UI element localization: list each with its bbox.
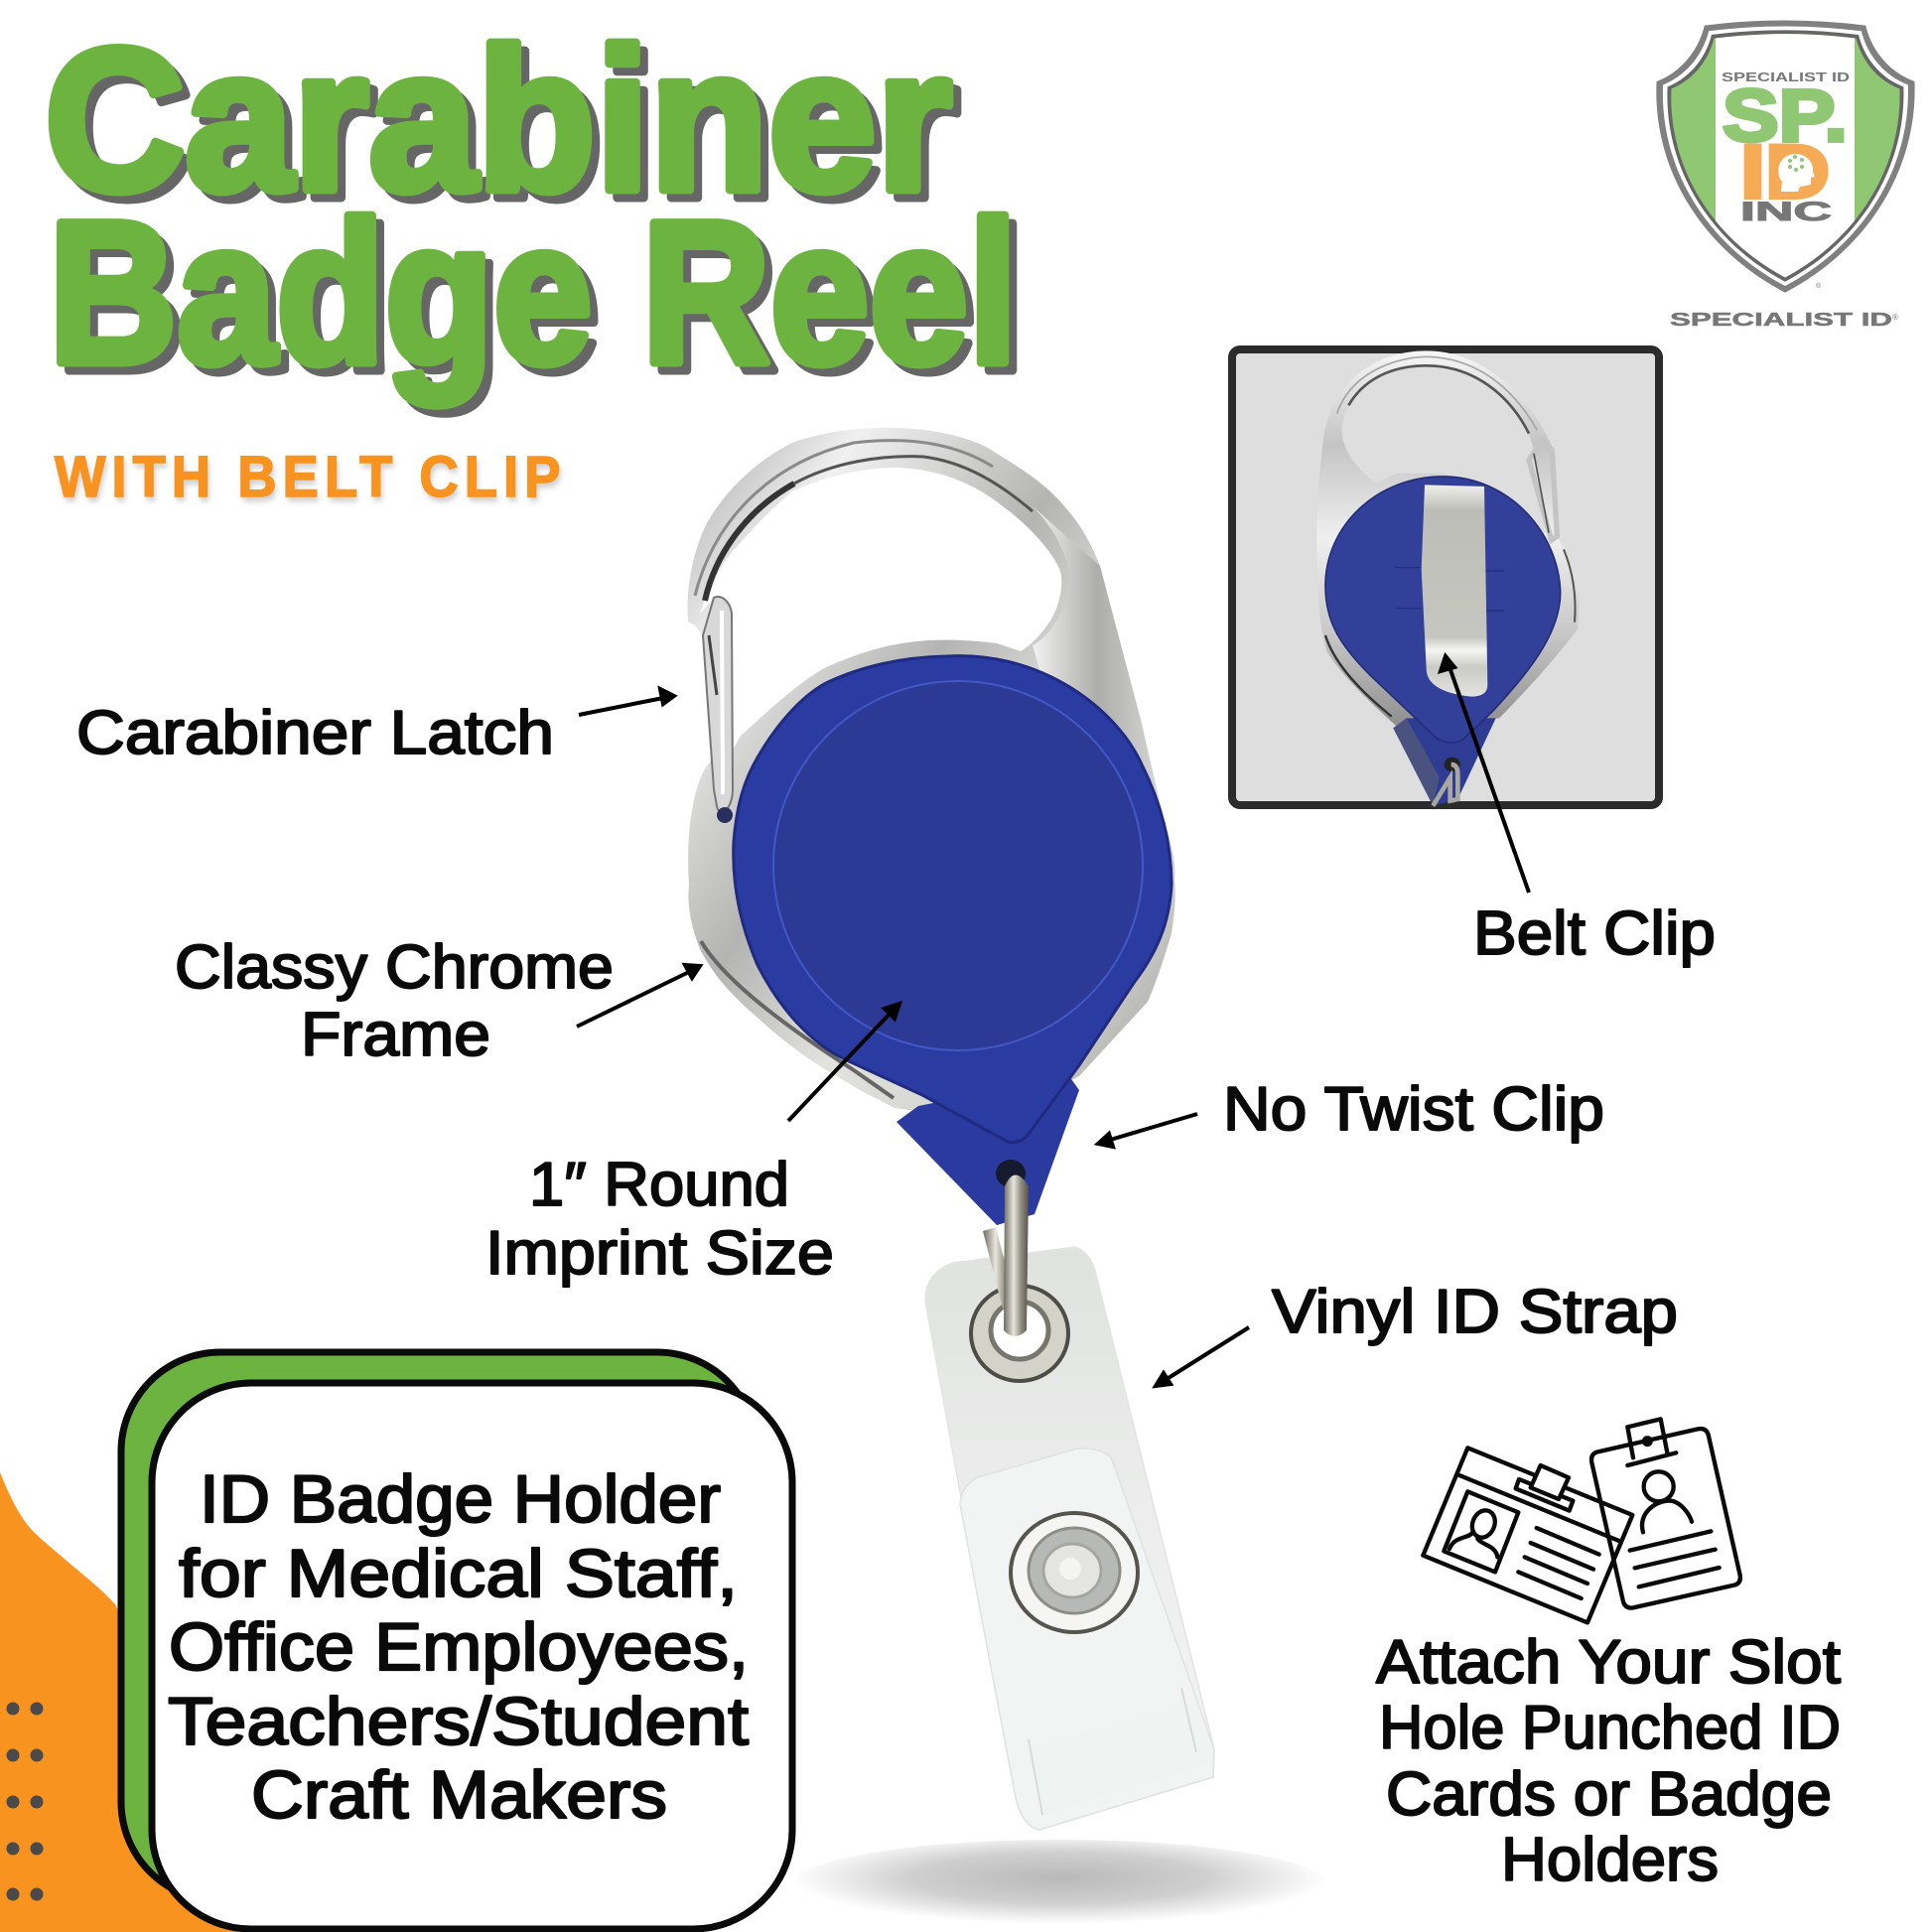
panel: back view inset <box>1232 349 1659 806</box>
title: Badge Reel <box>49 180 1018 406</box>
arrow: carabiner latch <box>579 689 674 715</box>
callout text: ID Badge Holder <box>200 1461 721 1537</box>
logo: Specialist ID shield: SP. <box>1723 74 1848 157</box>
logo: Specialist ID shield: INC <box>1740 197 1832 226</box>
main product: blue reel body <box>734 656 1172 1225</box>
label: vinyl ID strap: Vinyl ID Strap <box>1272 1278 1678 1346</box>
callout text: for Medical Staff, <box>179 1536 738 1611</box>
arrow: vinyl strap <box>1156 1327 1249 1386</box>
icon: back of badge reel <box>1316 350 1580 806</box>
logo: Specialist ID shield: SPECIALIST ID <box>1670 310 1892 330</box>
main product: chrome carabiner frame <box>687 428 1175 1122</box>
logo: Specialist ID shield <box>1658 20 1913 330</box>
floor shadow <box>791 1840 1327 1931</box>
logo: Specialist ID shield: ® <box>1816 282 1822 290</box>
title <box>45 7 1026 414</box>
label: classy chrome frame: Classy Chrome <box>175 933 614 1002</box>
label: carabiner latch: Carabiner Latch <box>76 699 554 767</box>
vinyl ID strap <box>925 1247 1214 1830</box>
arrow: no twist clip <box>1098 1114 1197 1147</box>
icon: ID badges <box>1423 1419 1740 1622</box>
subtitle: WITH BELT CLIP <box>57 449 562 513</box>
logo: Specialist ID shield: ID <box>1740 130 1830 214</box>
label: imprint size: 1″ Round <box>529 1151 789 1219</box>
label: belt clip: Belt Clip <box>1473 899 1716 968</box>
text: attach your ID cards: Hole Punched ID <box>1379 1694 1841 1762</box>
no twist clip triangle <box>897 1076 1079 1225</box>
label: classy chrome frame: Frame <box>301 1001 490 1069</box>
logo: Specialist ID shield: SPECIALIST ID <box>1722 70 1850 84</box>
logo: Specialist ID shield: ® <box>1892 313 1898 322</box>
carabiner latch <box>703 597 733 823</box>
title: Carabiner <box>53 15 960 241</box>
dot pattern <box>6 1702 44 1900</box>
arrow: belt clip <box>1441 656 1529 893</box>
label: imprint size: Imprint Size <box>485 1219 834 1288</box>
subtitle: WITH BELT CLIP <box>55 444 560 508</box>
text: attach your ID cards: Cards or Badge <box>1386 1760 1832 1829</box>
title: Badge Reel <box>57 188 1026 414</box>
label: imprint size <box>485 1151 834 1288</box>
title: Carabiner <box>45 7 952 233</box>
strap snap button <box>1011 1513 1138 1632</box>
panel: use cases callout <box>121 1352 792 1929</box>
arrow: imprint size <box>788 1004 899 1121</box>
label: classy chrome frame <box>175 933 614 1069</box>
callout text: Teachers/Student <box>168 1684 749 1759</box>
arrow: chrome frame <box>577 965 700 1027</box>
label: no twist clip: No Twist Clip <box>1223 1075 1604 1144</box>
callout text: Office Employees, <box>169 1609 749 1685</box>
text: attach your ID cards: Attach Your Slot <box>1376 1628 1841 1697</box>
metal split ring <box>983 1175 1029 1336</box>
strap eyelet <box>971 1286 1068 1381</box>
text: attach your ID cards: Holders <box>1501 1826 1719 1894</box>
text: attach your ID cards <box>1376 1628 1841 1894</box>
callout text <box>168 1461 749 1833</box>
orange background blob <box>0 1472 238 1932</box>
callout text: Craft Makers <box>251 1757 667 1833</box>
